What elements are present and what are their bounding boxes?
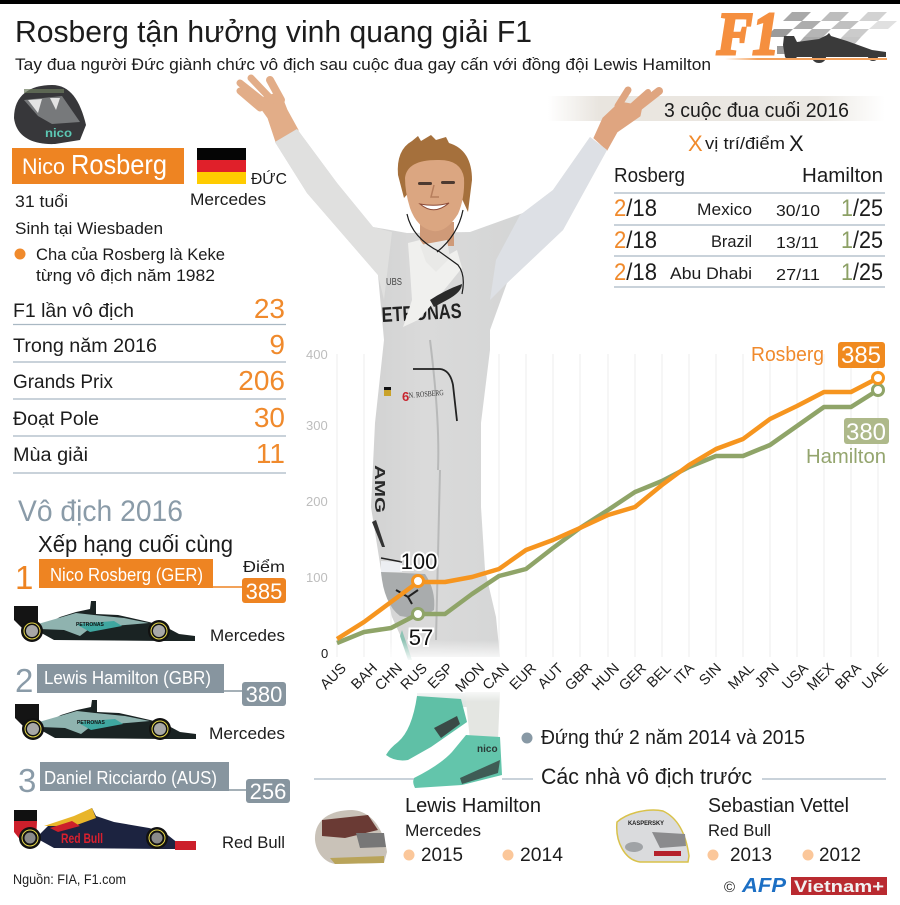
age: 31 tuổi xyxy=(15,192,68,211)
left sock xyxy=(417,693,467,707)
right sock xyxy=(465,692,500,740)
race labels: ESP xyxy=(425,661,457,692)
icon: Red Bull car xyxy=(14,808,196,850)
race labels: USA xyxy=(779,660,812,693)
panel: standing 1 Rosberg: Mercedes xyxy=(210,626,285,645)
heading: final standings: Xếp hạng cuối cùng xyxy=(38,531,233,557)
Rosberg end label xyxy=(751,342,885,369)
value label 57: 57 xyxy=(409,625,433,650)
subtitle: Tay đua người Đức giành chức vô địch sau cuộc đua gay cấn với đồng đội Lewis Hamilton xyxy=(15,55,711,74)
panel: career statistics: 9 xyxy=(269,329,285,360)
Rosberg line xyxy=(337,378,878,639)
heading: previous champions: Các nhà vô địch trước xyxy=(541,764,752,789)
face xyxy=(405,160,464,231)
panel: career statistics: 30 xyxy=(254,402,285,433)
panel: driver profile xyxy=(12,85,287,285)
row: Mexico: 1/25 xyxy=(841,195,883,222)
race labels: MEX xyxy=(804,660,838,694)
name banner xyxy=(12,148,184,184)
point markers xyxy=(412,372,884,620)
panel: career statistics: 11 xyxy=(256,438,285,469)
table header: Rosberg xyxy=(614,165,685,187)
birthplace: Sinh tại Wiesbaden xyxy=(15,219,163,238)
row: Mexico: Mexico xyxy=(697,200,752,219)
panel: standing 2 Hamilton: 2 xyxy=(15,662,33,699)
icon: Mercedes car: PETRONAS xyxy=(76,622,104,628)
race labels: CAN xyxy=(480,661,513,693)
race labels: UAE xyxy=(859,660,892,693)
heading: champion 2016: Vô địch 2016 xyxy=(18,495,183,528)
team label: Mercedes xyxy=(190,190,266,209)
race labels: AUT xyxy=(535,660,567,692)
icon: Vettel helmet xyxy=(617,810,689,862)
champion: Lewis Hamilton: 2015 xyxy=(421,845,463,866)
panel: standing 1 Rosberg: Điểm xyxy=(243,558,285,576)
champion: Lewis Hamilton xyxy=(315,795,563,866)
panel: last three races: Hamilton xyxy=(802,165,883,187)
collar flap xyxy=(403,240,462,327)
teal hint behind leg xyxy=(400,630,412,660)
icon: German flag xyxy=(197,148,246,184)
champion: Sebastian Vettel: 2012 xyxy=(819,845,861,866)
Rosberg end label: Rosberg xyxy=(751,344,824,366)
right hand xyxy=(594,90,659,150)
row: Brazil: 13/11 xyxy=(776,235,819,252)
racing suit xyxy=(275,129,607,657)
panel: standing 1 Rosberg xyxy=(14,558,286,645)
panel: standing 2 Hamilton: Lewis Hamilton (GBR) xyxy=(44,668,211,688)
icon: Rosberg helmet: nico xyxy=(45,126,72,140)
left boot xyxy=(386,696,467,760)
champion: Lewis Hamilton: 2014 xyxy=(520,845,563,866)
panel: career statistics: Đoạt Pole xyxy=(13,409,99,430)
panel: standing 1 Rosberg: 385 xyxy=(246,579,282,604)
panel: standing 3 Ricciardo: Red Bull xyxy=(222,833,285,852)
name banner: Rosberg xyxy=(71,149,167,180)
race labels: MON xyxy=(453,661,488,696)
bullet: father note: từng vô địch năm 1982 xyxy=(36,266,215,285)
panel: standing 1 Rosberg: Nico Rosberg (GER) xyxy=(50,565,203,585)
position and points key: X xyxy=(688,131,703,156)
source: Nguồn: FIA, F1.com xyxy=(13,871,126,887)
value label 100: 100 xyxy=(401,549,437,574)
race labels: ITA xyxy=(671,660,698,687)
panel: standing 2 Hamilton: 380 xyxy=(246,682,282,707)
row: Brazil: Brazil xyxy=(711,232,752,251)
panel: career statistics: 23 xyxy=(254,293,285,324)
row: Mexico: 2/18 xyxy=(614,195,657,222)
Hamilton end label: Hamilton xyxy=(806,446,886,468)
name banner: Nico xyxy=(22,154,65,179)
panel: career statistics: F1 lần vô địch xyxy=(13,301,134,322)
Hamilton end label xyxy=(806,418,889,468)
icon: Mercedes car: PETRONAS xyxy=(77,720,105,726)
left hand xyxy=(240,78,298,142)
race labels: RUS xyxy=(398,661,431,693)
band heading: 3 cuộc đua cuối 2016 xyxy=(664,100,849,122)
race labels: BEL xyxy=(644,661,675,691)
credit: AFP and Vietnam+: AFP xyxy=(741,875,787,897)
race labels: GER xyxy=(616,661,650,694)
icon: Mercedes car xyxy=(15,700,196,740)
photo: Nico Rosberg arms raised: UBS xyxy=(386,277,402,288)
chart grid and axis: 100 xyxy=(306,570,328,585)
icon: Rosberg helmet xyxy=(14,85,86,144)
panel: standing 2 Hamilton xyxy=(15,662,286,743)
icon: Mercedes car xyxy=(14,601,195,642)
photo: Nico Rosberg arms raised: nico xyxy=(477,744,498,755)
race labels: GBR xyxy=(562,661,596,694)
credit: AFP and Vietnam+ xyxy=(724,875,887,897)
row: Brazil xyxy=(614,227,883,254)
head hair xyxy=(398,135,472,212)
panel: career statistics xyxy=(13,293,286,473)
race labels: MAL xyxy=(725,661,758,693)
suit name patch: N. ROSBERG xyxy=(408,388,444,400)
photo: Nico Rosberg arms raised xyxy=(240,78,659,788)
row: Mexico xyxy=(614,195,883,222)
panel: standing 2 Hamilton: Mercedes xyxy=(209,724,285,743)
bullet: father note: Cha của Rosberg là Keke xyxy=(36,245,225,264)
chart grid and axis: 300 xyxy=(306,418,328,433)
knee pad xyxy=(381,572,434,617)
row: Abu Dhabi: 1/25 xyxy=(841,259,883,286)
race labels xyxy=(317,660,892,696)
panel: career statistics: Grands Prix xyxy=(13,372,113,393)
bullet: father note xyxy=(14,245,225,285)
panel: standing 3 Ricciardo: Daniel Ricciardo (AUS) xyxy=(44,768,217,788)
panel: career statistics: Mùa giải xyxy=(13,445,88,466)
right boot xyxy=(413,735,502,788)
champion: Sebastian Vettel: 2013 xyxy=(730,845,772,866)
row: Abu Dhabi xyxy=(614,259,883,286)
icon: F1 logo xyxy=(716,1,897,67)
AMG leg logo: AMG xyxy=(371,465,388,513)
credit: AFP and Vietnam+: Vietnam+ xyxy=(794,877,884,896)
chart grid and axis xyxy=(306,347,878,661)
line chart: Rosberg and Hamilton points xyxy=(317,342,892,696)
race labels: BAH xyxy=(348,661,381,693)
icon: Red Bull car: Red Bull xyxy=(61,830,103,846)
chart grid and axis: 200 xyxy=(306,494,328,509)
title: Rosberg tận hưởng vinh quang giải F1 xyxy=(15,14,532,49)
band heading xyxy=(548,96,885,122)
champion: Sebastian Vettel xyxy=(617,795,861,866)
suit name patch xyxy=(384,369,457,421)
chart grid and axis: 0 xyxy=(321,646,328,661)
position and points key xyxy=(688,131,804,156)
nationality label: ĐỨC xyxy=(251,169,287,188)
champion: Sebastian Vettel: Red Bull xyxy=(708,821,771,840)
race labels: CHN xyxy=(372,661,406,694)
panel: career statistics: 206 xyxy=(238,365,285,396)
race labels: AUS xyxy=(317,661,350,693)
panel: standing 3 Ricciardo: 256 xyxy=(250,779,286,804)
row: Abu Dhabi: 27/11 xyxy=(776,267,820,284)
chart grid and axis: 400 xyxy=(306,347,328,362)
neck xyxy=(420,222,454,246)
note: runner-up 2014 and 2015: Đứng thứ 2 năm 2014 và 2015 xyxy=(541,727,805,749)
icon: Hamilton helmet xyxy=(315,810,387,864)
race labels: BRA xyxy=(832,660,865,693)
panel: previous champions xyxy=(314,764,886,866)
row: Mexico: 30/10 xyxy=(776,203,820,220)
panel: career statistics: Trong năm 2016 xyxy=(13,336,157,357)
panel: last three races xyxy=(548,96,885,287)
suit name patch: 6 xyxy=(402,389,409,404)
row: Brazil: 1/25 xyxy=(841,227,883,254)
panel: standing 1 Rosberg: 1 xyxy=(15,559,33,596)
icon: F1 logo: F1 xyxy=(716,1,779,67)
panel: standing 3 Ricciardo xyxy=(14,762,290,852)
champion: Lewis Hamilton: Lewis Hamilton xyxy=(405,795,541,817)
Hamilton end label: 380 xyxy=(846,419,886,446)
Rosberg end label: 385 xyxy=(841,342,881,369)
credit: AFP and Vietnam+: © xyxy=(724,879,735,896)
champion: Sebastian Vettel: Sebastian Vettel xyxy=(708,795,849,817)
race labels: JPN xyxy=(752,661,783,691)
position and points key: vị trí/điểm xyxy=(705,134,785,153)
position and points key: X xyxy=(789,131,804,156)
row: Abu Dhabi: 2/18 xyxy=(614,259,657,286)
race labels: EUR xyxy=(507,661,540,693)
race labels: HUN xyxy=(589,661,623,694)
earphone wires xyxy=(407,210,463,294)
icon: Vettel helmet: KASPERSKY xyxy=(628,821,664,827)
champion: Lewis Hamilton: Mercedes xyxy=(405,821,481,840)
row: Brazil: 2/18 xyxy=(614,227,657,254)
leg fade xyxy=(370,640,510,662)
Hamilton line xyxy=(337,390,878,643)
top black bar xyxy=(0,0,900,4)
race labels: SIN xyxy=(696,661,725,689)
sponsor PETRONAS: ETRONAS xyxy=(381,300,462,327)
panel: standing 3 Ricciardo: 3 xyxy=(18,762,36,799)
row: Abu Dhabi: Abu Dhabi xyxy=(670,264,752,283)
